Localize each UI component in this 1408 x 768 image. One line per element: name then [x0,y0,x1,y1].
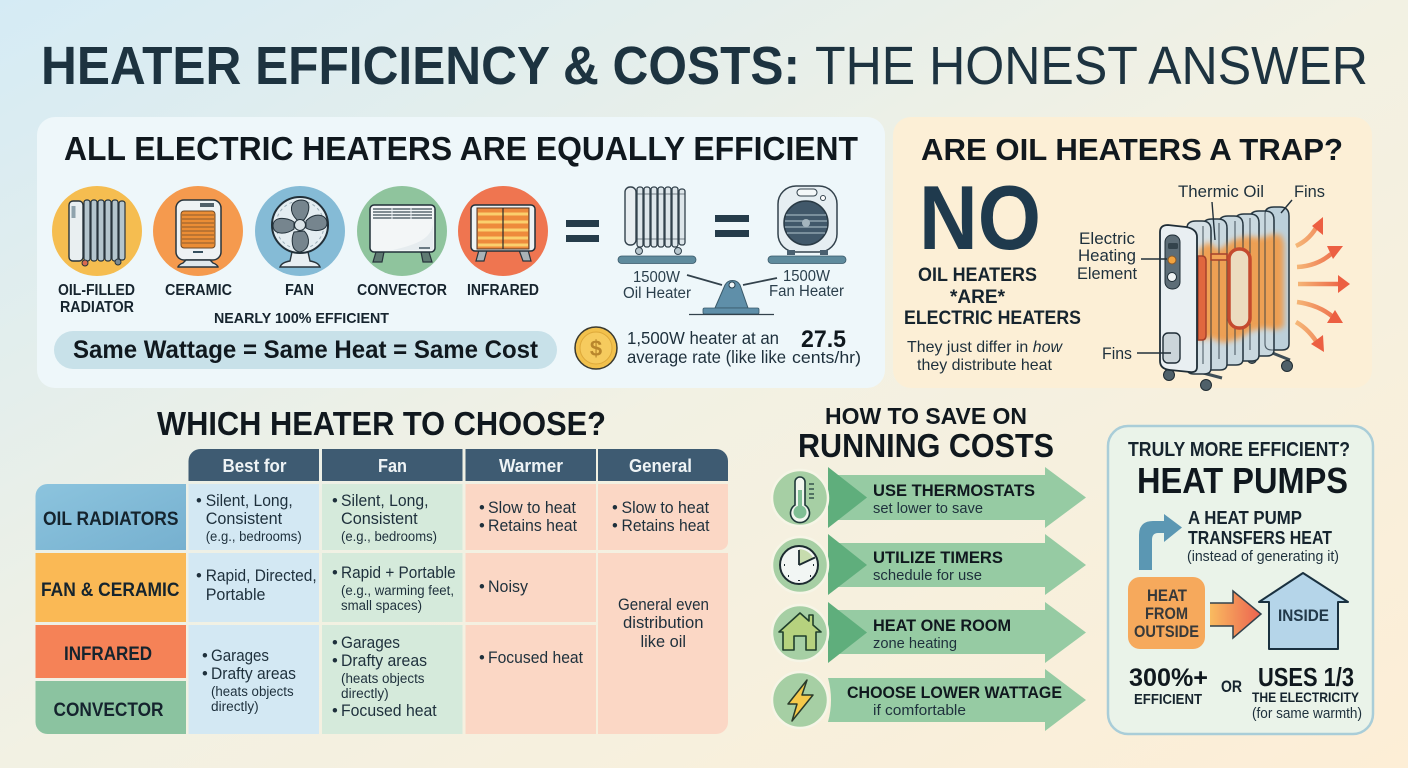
label: 1500W oil heater [623,269,691,302]
cell: fan column infrared and convector: • [332,634,338,652]
text: heat one room [873,616,1011,652]
icon: clock [772,537,828,593]
cell: fan column fan and ceramic: • [332,564,338,582]
table: heater comparison [36,449,728,734]
heading: how to save on running costs [798,403,1054,464]
panel: heat pumps [1108,426,1373,734]
cell: best for oil radiators: • [196,492,202,510]
cell: general merged: General even [618,596,709,614]
tip: utilize timers [772,534,1086,595]
platform: right scale pan [768,256,846,264]
box: heat from outside: HEAT [1147,587,1187,605]
stat: uses one third: (for same warmth) [1252,706,1362,722]
cell: fan column fan and ceramic [322,553,462,622]
diagram: oil radiator cutaway [1160,207,1292,390]
stat: uses one third: THE ELECTRICITY [1252,689,1360,705]
cell: best for infrared and convector [188,625,319,734]
text: choose lower wattage: if comfortable [873,702,966,719]
arrow: thermostats [828,467,1086,528]
label: thermic oil [1178,182,1264,240]
text: 1,500W heater rate [627,328,786,367]
cell: general merged: distribution [623,614,704,632]
heading: heat pumps: HEAT PUMPS [1137,460,1348,501]
cell: best for fan and ceramic: • [196,567,202,585]
heading: which heater to choose: WHICH HEATER TO CHOOSE? [157,405,606,442]
text: they differ in how they distribute heat: They just differ in how [907,339,1063,356]
text: they differ in how they distribute heat [907,339,1063,374]
label: oil-filled radiator: RADIATOR [60,299,134,316]
icon: dollar coin [575,327,617,369]
cell: fan column oil radiators [322,484,462,550]
icon: second equals sign [715,215,749,237]
icon: oil-filled radiator [52,186,142,276]
icon: fan [255,186,345,276]
text: a heat pump transfers heat: A HEAT PUMP [1188,508,1302,528]
title: HEATER EFFICIENCY & COSTS: [41,36,800,96]
cell: warmer infrared and convector: • [479,649,485,667]
stat: uses one third [1252,662,1362,722]
table header row: Best for [222,456,286,476]
heading: all electric heaters: ALL ELECTRIC HEATERS ARE EQUALLY EFFICIENT [64,130,858,167]
text: oil heaters are electric heaters [904,265,1081,329]
arrow notch: heat one room [828,602,867,663]
cell: fan column fan and ceramic: Rapid + Portable [341,564,456,582]
cell: warmer oil radiators: • [479,499,485,517]
text: use thermostats [873,481,1035,517]
cell: fan column oil radiators: • [332,492,338,510]
label: ceramic: CERAMIC [165,282,232,299]
box: heat from outside [1128,577,1205,649]
label: 1500W oil heater: Oil Heater [623,285,691,302]
icon: fan heater on scale [778,186,837,255]
cell: fan column infrared and convector: (heats objects [341,671,425,686]
cell: best for fan and ceramic [188,553,319,622]
panel: all electric heaters are equally efficient [37,117,885,388]
cell: general oil radiators: Slow to heat [622,499,709,517]
cell: fan column oil radiators: Silent, Long, [341,492,428,510]
label: infrared: INFRARED [467,282,539,299]
table header row: Warmer [499,456,563,476]
cell: best for oil radiators: Silent, Long, [206,492,293,510]
cell: warmer fan and ceramic: • [479,578,485,596]
label: thermic oil: Thermic Oil [1178,182,1264,201]
text: oil heaters are electric heaters: OIL HEATERS [918,265,1037,286]
label: nearly 100% efficient: NEARLY 100% EFFICIENT [214,310,389,327]
cell: warmer fan and ceramic: Noisy [488,578,529,596]
cell: warmer oil radiators: Retains heat [488,517,577,535]
arrow: timers [828,534,1086,595]
arrow: outside to inside [1210,591,1261,638]
cell: warmer infrared and convector: Focused heat [488,649,583,667]
cell: fan column infrared and convector: • [332,652,338,670]
cell: warmer oil radiators: Slow to heat [488,499,576,517]
text: a heat pump transfers heat: (instead of generating it) [1187,549,1339,565]
icon: ceramic heater [153,186,243,276]
text: oil heaters are electric heaters: *ARE* [950,287,1006,308]
cell: fan column infrared and convector: directly) [341,686,389,701]
label: bottom fins [1102,344,1171,363]
cell: general oil radiators: Retains heat [622,517,710,535]
cell: best for infrared and convector: • [202,647,208,665]
row label: fan and ceramic [36,553,186,622]
big answer: no: NO [919,168,1041,269]
arrow: heat one room [828,602,1086,663]
cell: best for fan and ceramic: Portable [206,586,266,604]
icon: infrared [458,186,548,276]
heading: how to save on running costs: HOW TO SAVE ON [825,403,1027,429]
text: choose lower wattage: CHOOSE LOWER WATTAGE [847,683,1062,702]
table header row: Fan [378,456,407,476]
cell: general merged: like oil [640,633,686,651]
text: they differ in how they distribute heat: they distribute heat [917,357,1053,374]
cell: fan column infrared and convector [322,625,462,734]
box: heat from outside: OUTSIDE [1134,623,1199,641]
text: utilize timers: UTILIZE TIMERS [873,548,1003,567]
cell: general oil radiators [598,484,728,550]
row label: convector: CONVECTOR [54,700,164,721]
label: electric heating element: Element [1077,264,1137,283]
icon: convector [357,186,447,276]
label: bottom fins: Fins [1102,344,1132,363]
heading: truly more efficient: TRULY MORE EFFICIENT? [1128,439,1350,461]
label: 1500W fan heater: Fan Heater [769,283,844,300]
cell: best for oil radiators: Consistent [206,510,283,528]
row label: infrared: INFRARED [64,644,152,665]
icon: house [772,605,828,661]
tip: choose lower wattage [772,669,1086,731]
cell: best for oil radiators: (e.g., bedrooms) [206,529,302,544]
panel: are oil heaters a trap [893,117,1372,390]
cell: best for infrared and convector: (heats objects [211,684,294,699]
arrow notch: timers [828,534,867,595]
text: 27.5 cents per hour: cents/hr) [792,348,861,367]
row label: oil radiators: OIL RADIATORS [43,509,178,530]
cell: best for infrared and convector: • [202,665,208,683]
cell: warmer oil radiators [466,484,596,550]
text: use thermostats: set lower to save [873,500,983,517]
text: a heat pump transfers heat: TRANSFERS HEAT [1188,528,1332,548]
icon: house inside [1259,573,1348,649]
label: top fins [1281,182,1325,213]
row label: infrared [36,625,186,678]
text: use thermostats: USE THERMOSTATS [873,481,1035,500]
title [41,36,1368,96]
cell: fan column fan and ceramic: (e.g., warming feet, [341,583,454,598]
icon: transfer arrow [1139,514,1182,570]
cell: fan column oil radiators: Consistent [341,510,418,528]
tip: use thermostats [772,467,1086,528]
cell: fan column infrared and convector: Garages [341,634,400,652]
text: 27.5 cents per hour [792,326,861,367]
title: THE HONEST ANSWER [815,36,1368,96]
heading: are oil heaters a trap: ARE OIL HEATERS A TRAP? [921,132,1343,167]
row label: fan and ceramic: FAN & CERAMIC [41,580,180,601]
icon: balance fulcrum [687,275,777,314]
icon: lightning bolt [772,672,828,728]
cell: best for fan and ceramic: Rapid, Directed, [206,567,317,585]
icon: house inside: INSIDE [1278,607,1329,625]
label: 1500W fan heater: 1500W [783,268,830,285]
label: electric heating element [1077,229,1167,283]
table header row [188,449,728,481]
label: fan: FAN [285,282,314,299]
platform: left scale pan [618,256,696,264]
cell: fan column infrared and convector: Focused heat [341,702,437,720]
stat: 300% efficient [1129,664,1208,708]
text: choose lower wattage [847,683,1062,719]
label: top fins: Fins [1294,182,1325,201]
cell: warmer fan and ceramic [466,553,596,622]
text: 1,500W heater rate: 1,500W heater at an [627,328,779,348]
arrow: lower wattage [828,669,1086,731]
icon: thermometer [772,470,828,526]
text: 27.5 cents per hour: 27.5 [801,326,846,353]
cell: best for infrared and convector: Garages [211,647,269,665]
label: 1500W fan heater [769,268,844,300]
cell: fan column infrared and convector: • [332,702,338,720]
stat: uses one third: USES 1/3 [1258,662,1354,692]
text: utilize timers: schedule for use [873,567,982,584]
cell: general oil radiators: • [612,499,618,517]
arrow notch: thermostats [828,467,867,528]
label: electric heating element: Heating [1078,246,1136,265]
row label: oil radiators [36,484,186,550]
label: 1500W oil heater: 1500W [633,269,680,286]
text: utilize timers [873,548,1003,584]
cell: fan column oil radiators: (e.g., bedrooms) [341,529,437,544]
text: 1,500W heater rate: average rate (like like [627,347,786,367]
label: or: OR [1221,677,1242,696]
icon: oil heater on scale [625,187,685,254]
text: a heat pump transfers heat [1187,508,1339,565]
cell: warmer infrared and convector [466,625,596,734]
label: convector: CONVECTOR [357,282,447,299]
text: heat one room: HEAT ONE ROOM [873,616,1011,635]
cell: general oil radiators: • [612,517,618,535]
label: oil-filled radiator: OIL-FILLED [58,282,135,299]
box: heat from outside: FROM [1145,605,1188,623]
label: electric heating element: Electric [1079,229,1135,248]
callout: same wattage pill: Same Wattage = Same Heat = Same Cost [73,336,539,364]
table header row: General [629,456,692,476]
row label: convector [36,681,186,734]
cell: fan column fan and ceramic: small spaces) [341,598,422,613]
cell: fan column infrared and convector: Drafty areas [341,652,427,670]
tip: heat one room [772,602,1086,663]
icon: dollar coin: $ [590,336,602,361]
arrows: radiating heat [1296,217,1350,352]
cell: best for oil radiators [188,484,319,550]
cell: warmer oil radiators: • [479,517,485,535]
cell: best for infrared and convector: Drafty areas [211,665,296,683]
stat: 300% efficient: EFFICIENT [1134,692,1202,708]
label: oil-filled radiator [58,282,135,316]
stat: 300% efficient: 300%+ [1129,664,1208,692]
icon: equals sign [566,220,599,242]
text: oil heaters are electric heaters: ELECTRIC HEATERS [904,308,1081,329]
text: heat one room: zone heating [873,635,957,652]
heading: how to save on running costs: RUNNING COSTS [798,427,1054,464]
cell: general merged [598,553,728,734]
cell: best for infrared and convector: directly) [211,699,259,714]
